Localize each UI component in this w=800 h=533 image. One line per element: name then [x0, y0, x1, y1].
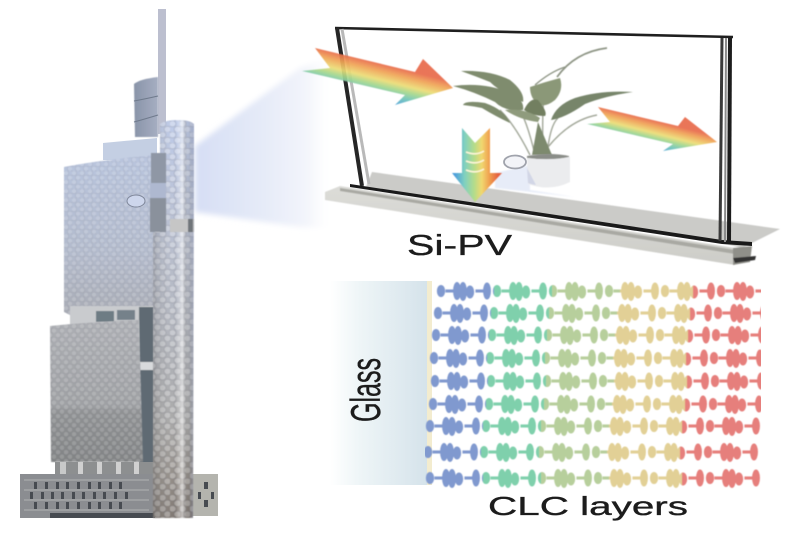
lower office block — [50, 320, 143, 462]
window frame — [335, 28, 733, 243]
window sill — [325, 172, 780, 265]
magnifier ring near pot — [504, 156, 526, 168]
glass panel — [330, 281, 432, 485]
upper office block — [64, 155, 155, 315]
main core tower — [153, 120, 194, 518]
CLC row 3 — [432, 326, 765, 344]
transmitted spectrum arrow — [587, 107, 717, 151]
tower building — [20, 9, 218, 518]
window assembly — [302, 28, 780, 265]
window bottom rail — [350, 184, 752, 246]
CLC row 8 — [424, 444, 757, 462]
label: Si-PV: Si-PV — [407, 230, 513, 262]
reflected spectrum down arrow — [452, 128, 502, 202]
tower spire — [158, 9, 166, 134]
CLC row 2 — [434, 304, 767, 322]
CLC molecular layers — [424, 282, 770, 488]
projection beam from tower to window — [195, 55, 335, 228]
tower crown cylinder — [134, 77, 158, 137]
base podium — [20, 474, 218, 518]
incident spectrum arrow — [302, 48, 453, 105]
podium columns — [55, 462, 155, 476]
label: Glass: Glass — [342, 358, 389, 422]
CLC row 5 — [431, 372, 764, 390]
light blue reflection on sill — [495, 165, 575, 197]
upper gap with dark glazing — [70, 306, 154, 467]
plant pot — [527, 154, 570, 188]
CLC row 9 — [426, 470, 759, 488]
plant leaves — [453, 71, 633, 155]
label: CLC layers: CLC layers — [488, 491, 688, 521]
CLC row 1 — [437, 282, 770, 300]
plant stems — [500, 48, 607, 155]
small upper block — [103, 138, 157, 160]
CLC row 6 — [429, 396, 762, 414]
core dark window band — [150, 153, 194, 232]
CLC row 7 — [426, 418, 759, 436]
CLC row 4 — [430, 350, 763, 368]
plant — [453, 48, 633, 155]
magnifier ring on tower — [127, 195, 145, 207]
